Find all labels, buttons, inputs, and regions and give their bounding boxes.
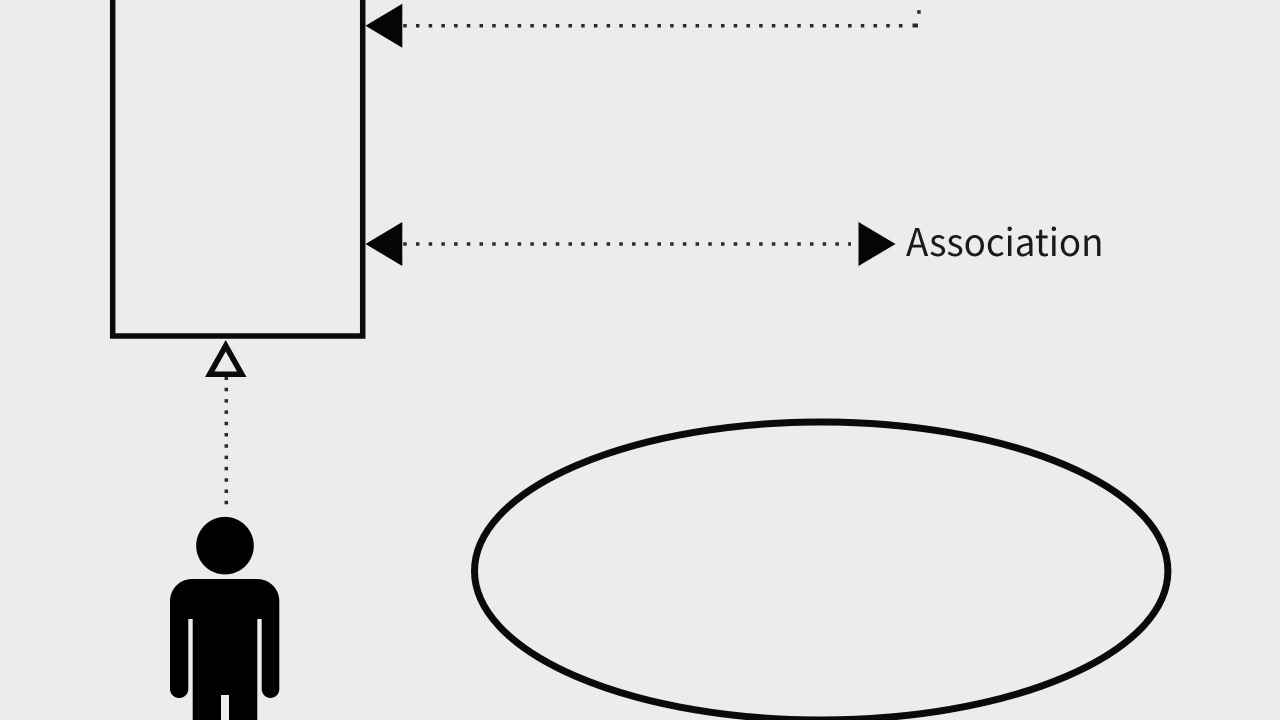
label: Association: Association (906, 212, 1104, 267)
arrow: top dotted association (366, 4, 921, 48)
arrow: bidirectional dotted association (366, 222, 896, 266)
use case ellipse (474, 422, 1168, 720)
arrow: hollow triangle generalization (205, 340, 246, 505)
class rectangle (113, 0, 363, 336)
icon: person (170, 517, 279, 720)
